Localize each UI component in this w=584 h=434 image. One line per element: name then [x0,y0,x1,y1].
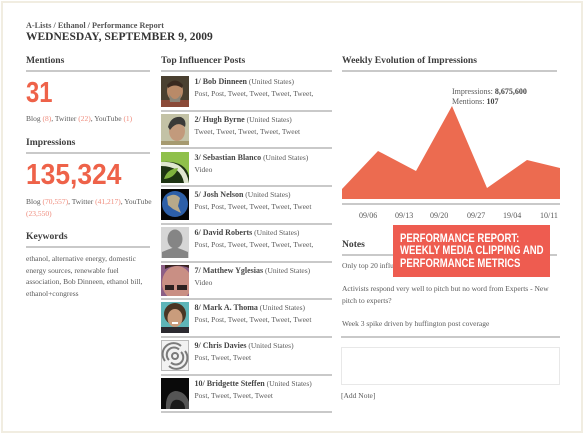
avatar: Hugh Byrne [161,114,189,145]
note 3: Week 3 spike driven by huffington post coverage [342,319,489,328]
avatar: Sebastian Blanco [161,152,189,183]
heading: impressions: Impressions [26,137,75,148]
chart tooltip [452,87,527,106]
avatar: Mark A. Thoma [161,302,189,333]
post 1 [194,77,313,98]
heading: keywords: Keywords [26,231,68,242]
post 8: 8/ Mark A. Thoma (United States) [194,303,305,312]
post 6 [194,228,313,249]
post 7: 7/ Matthew Yglesias (United States) [194,266,310,275]
keywords text: ethanol, alternative energy, domestic [26,254,136,263]
avatar: Matthew Yglesias [161,265,189,296]
chart tooltip: Mentions: 107 [452,96,498,106]
note 2: Activists respond very well to pitch but no word from Experts - New [342,284,549,293]
impressions breakdown: (23,550) [26,209,52,218]
post 1: 1/ Bob Dinneen (United States) [194,77,294,86]
callout: performance report [393,225,550,277]
mentions number: 31 [26,77,52,109]
avatar: Bridgette Steffen [161,378,189,409]
post 6: Post, Post, Tweet, Tweet, Tweet, Tweet, [194,240,313,249]
chart x-axis labels [359,211,558,220]
impressions number: 135,324 [26,159,121,191]
note 2 [342,284,549,305]
note 2: pitch to experts? [342,296,392,305]
post 9: Post, Tweet, Tweet [194,353,251,362]
post 5: Post, Post, Tweet, Tweet, Tweet, Tweet [194,202,311,211]
post 5 [194,190,312,211]
chart x-axis labels: 10/11 [540,211,558,220]
impressions breakdown [26,197,152,218]
heading: notes: Notes [342,239,365,250]
post 3 [194,153,308,174]
chart x-axis labels: 09/27 [467,211,485,220]
area chart [342,106,560,199]
post 6: 6/ David Roberts (United States) [194,228,299,237]
callout: performance report: PERFORMANCE METRICS [400,258,520,270]
post 2: Tweet, Tweet, Tweet, Tweet, Tweet [194,127,300,136]
avatar: Bob Dinneen [161,76,189,107]
keywords text: ethanol+congress [26,288,79,298]
chart tooltip: Impressions: 8,675,600 [452,87,527,96]
avatar: David Roberts [161,227,189,258]
chart x-axis labels: 09/20 [430,211,448,220]
post 9: 9/ Chris Davies (United States) [194,341,294,350]
post 3: 3/ Sebastian Blanco (United States) [194,153,308,162]
post 1: Post, Post, Tweet, Tweet, Tweet, Tweet, [194,89,313,98]
chart x-axis labels: 09/06 [359,211,377,220]
chart x-axis labels: 19/04 [503,211,521,220]
post 8: Post, Post, Tweet, Tweet, Tweet, Tweet [194,315,311,324]
breadcrumb: A-Lists / Ethanol / Performance Report [26,21,164,30]
post 10: Post, Tweet, Tweet, Tweet [194,391,273,400]
post 8 [194,303,312,324]
keywords text: energy sources, renewable fuel [26,266,119,274]
post 10 [194,379,312,400]
heading: weekly evolution: Weekly Evolution of Impressions [342,55,477,66]
post 10: 10/ Bridgette Steffen (United States) [194,379,312,388]
heading: top influencer posts: Top Influencer Posts [161,55,245,66]
post 2 [194,115,300,136]
post 2: 2/ Hugh Byrne (United States) [194,115,292,124]
mentions breakdown: Blog (8), Twitter (22), YouTube (1) [26,114,132,123]
keywords text [26,254,142,298]
post 7: Video [194,278,212,287]
date title: WEDNESDAY, SEPTEMBER 9, 2009 [26,31,213,43]
note input box [341,347,560,385]
note 1: Only top 20 influencers are listed here [342,261,457,270]
post 3: Video [194,165,212,174]
chart x-axis labels: 09/13 [395,211,413,220]
avatar: Chris Davies [161,340,189,371]
impressions breakdown: Blog (70,557), Twitter (41,217), YouTube [26,197,152,206]
heading: mentions: Mentions [26,55,64,66]
callout: performance report: WEEKLY MEDIA CLIPPING AND [400,245,544,257]
avatar: Josh Nelson [161,189,189,220]
post 9 [194,341,294,362]
add note link: [Add Note] [341,391,375,400]
keywords text: association, Bob Dinneen, ethanol bill, [26,277,142,286]
post 7 [194,266,310,287]
post 5: 5/ Josh Nelson (United States) [194,190,290,199]
callout: performance report: PERFORMANCE REPORT: [400,232,519,244]
